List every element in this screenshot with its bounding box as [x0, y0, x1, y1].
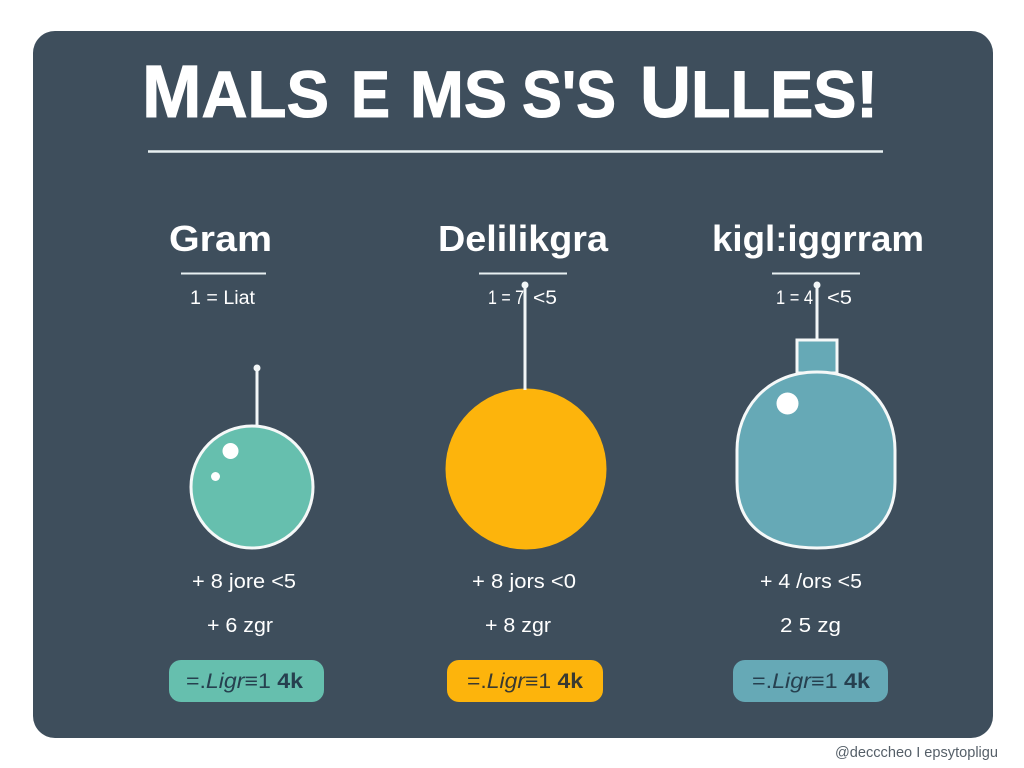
- title: S'S: [522, 57, 616, 131]
- icon: blue weight: [737, 282, 895, 548]
- title: E: [351, 57, 390, 131]
- heading: kigl:iggrram: kigl:iggrram: [712, 218, 924, 259]
- subtitle: Delilikgra: [488, 288, 557, 309]
- line: first value: + 8 jore <5: [192, 571, 296, 593]
- line: second value: 2 5 zg: [780, 615, 841, 637]
- line: second value: + 8 zgr: [485, 615, 551, 637]
- badge: blue: [733, 660, 888, 702]
- title: MS: [410, 57, 507, 131]
- subtitle: Delilikgra: 1 = 7: [488, 288, 524, 309]
- badge: yellow: =.Ligr≡1 4k: [467, 670, 583, 693]
- subtitle: Gram: 1 = Liat: [190, 288, 256, 309]
- badge: green: [169, 660, 324, 702]
- column: Delilikgra: [438, 218, 609, 702]
- line: first value: + 8 jors <0: [472, 571, 576, 593]
- line: first value: + 4 /ors <5: [760, 571, 862, 593]
- subtitle: kigl:iggrram: 1 = 4: [776, 288, 813, 309]
- footer credit: @decccheo I epsytopligu: [835, 744, 998, 761]
- column: Gram: [169, 218, 324, 702]
- icon: yellow sphere: [446, 282, 606, 550]
- badge: blue: =.Ligr≡1 4k: [752, 670, 870, 693]
- title: ULLES!: [640, 53, 878, 133]
- badge: green: =.Ligr≡1 4k: [186, 670, 303, 693]
- heading: Gram: Gram: [169, 218, 272, 259]
- heading: Delilikgra: Delilikgra: [438, 218, 609, 259]
- line: second value: + 6 zgr: [207, 615, 273, 637]
- subtitle: Delilikgra: <5: [533, 288, 557, 309]
- subtitle: kigl:iggrram: <5: [827, 288, 852, 309]
- title: MALS: [142, 50, 329, 133]
- title: [142, 50, 878, 133]
- column: kiglgram: [712, 218, 924, 702]
- icon: green sphere: [191, 364, 313, 548]
- badge: yellow: [447, 660, 603, 702]
- subtitle: kigl:iggrram: [776, 288, 852, 309]
